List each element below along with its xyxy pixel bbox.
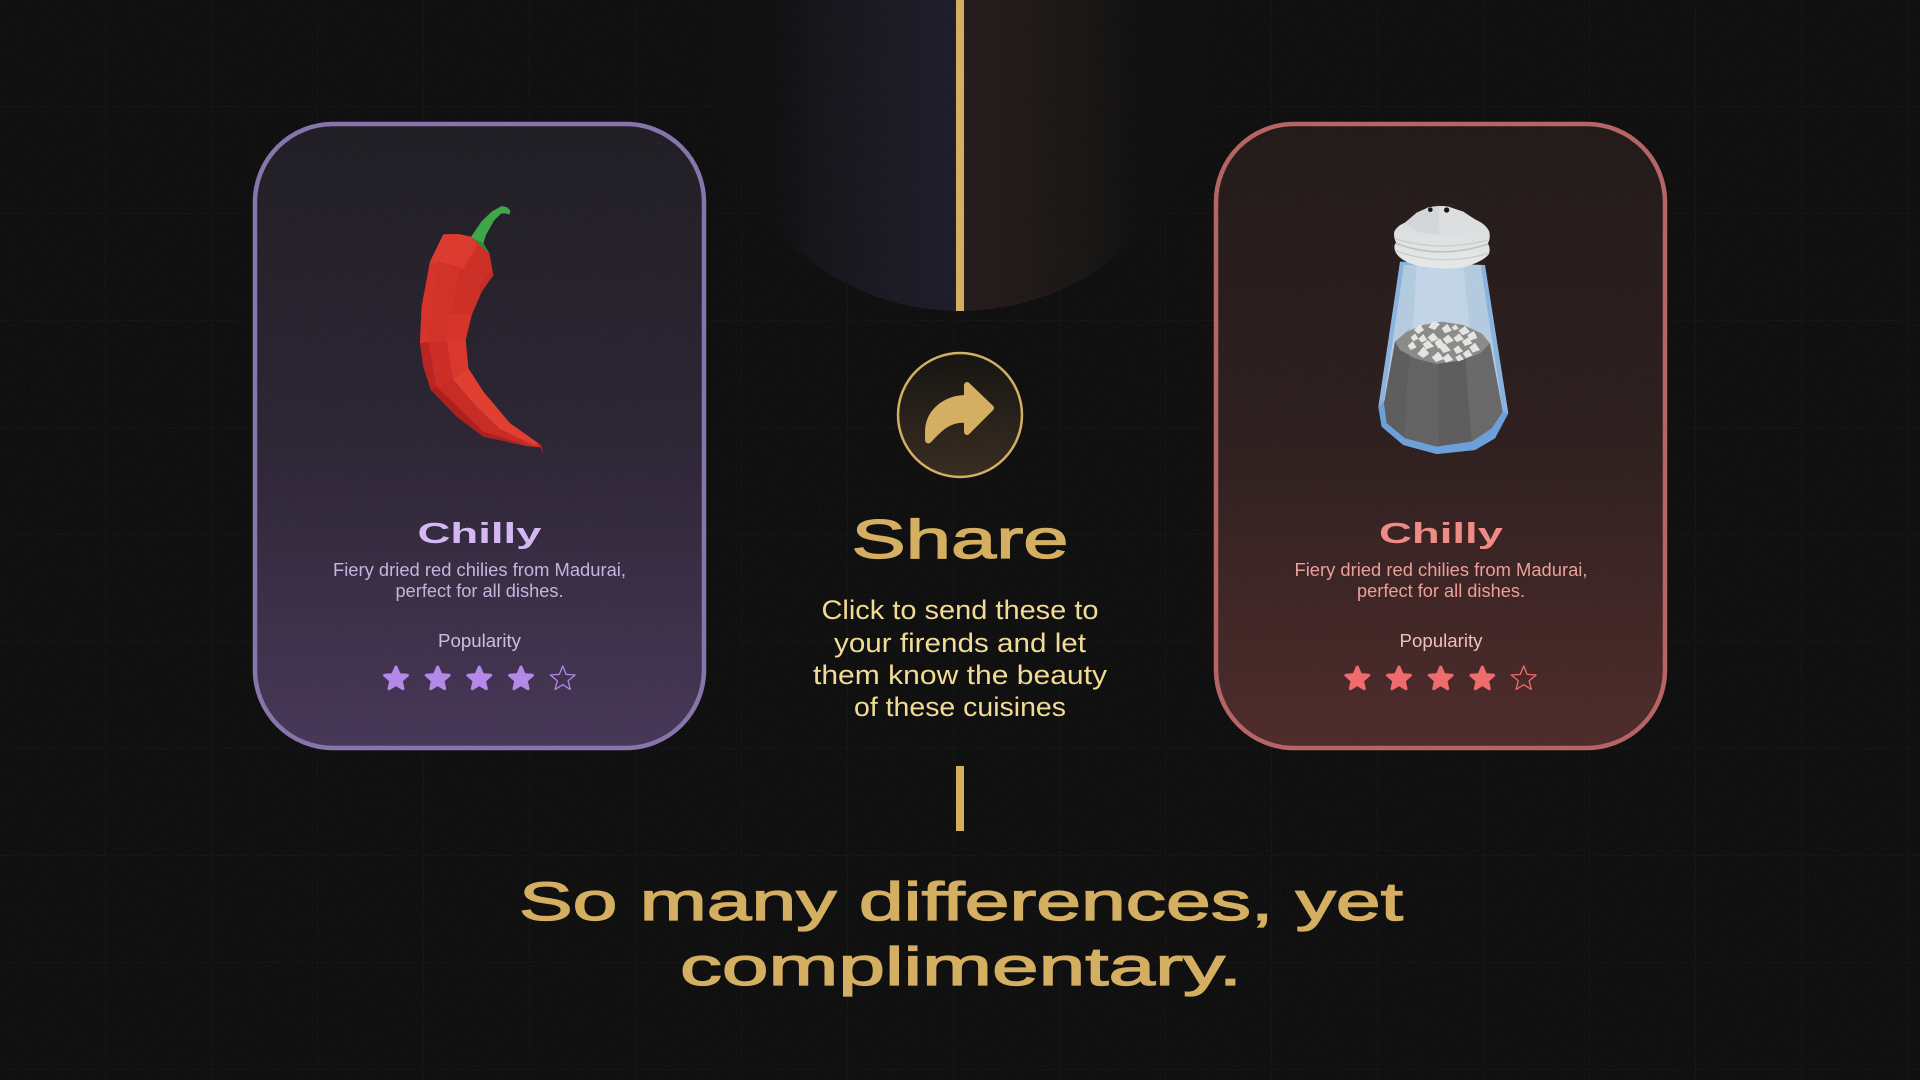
share description text: Click to send these to [822, 595, 1098, 625]
card description [1294, 560, 1588, 601]
share description text: your firends and let [834, 628, 1087, 658]
share description text: them know the beauty [813, 660, 1108, 690]
share description text: of these cuisines [854, 692, 1066, 722]
star rating: 4 of 5 [385, 666, 575, 690]
closing headline [519, 872, 1403, 997]
top semicircle backdrop [802, 0, 1096, 311]
panel: left card chilli [255, 124, 704, 748]
left card background [255, 124, 704, 748]
short gold divider [956, 766, 964, 831]
card title: Chilly [1379, 518, 1503, 550]
heading: Share: Share [852, 508, 1068, 570]
card description: perfect for all dishes. [396, 581, 564, 601]
illustration: red chilli [420, 206, 543, 454]
right card background [1216, 124, 1665, 748]
card description: perfect for all dishes. [1357, 581, 1525, 601]
top gold vertical line [956, 0, 964, 311]
card title: Chilly [418, 518, 542, 550]
card description [333, 560, 626, 601]
card description: Fiery dried red chilies from Madurai, [1294, 560, 1588, 580]
share description text [813, 595, 1108, 722]
popularity label: Popularity [1400, 631, 1482, 651]
closing headline: complimentary. [680, 937, 1242, 997]
popularity label: Popularity [438, 631, 521, 651]
star rating: 4 of 5 [1346, 666, 1536, 690]
closing headline: So many differences, yet [519, 872, 1403, 932]
card description: Fiery dried red chilies from Madurai, [333, 560, 626, 580]
icon: share button [898, 353, 1022, 477]
panel: right card salt shaker [1216, 124, 1665, 748]
illustration: salt shaker [1378, 204, 1508, 454]
